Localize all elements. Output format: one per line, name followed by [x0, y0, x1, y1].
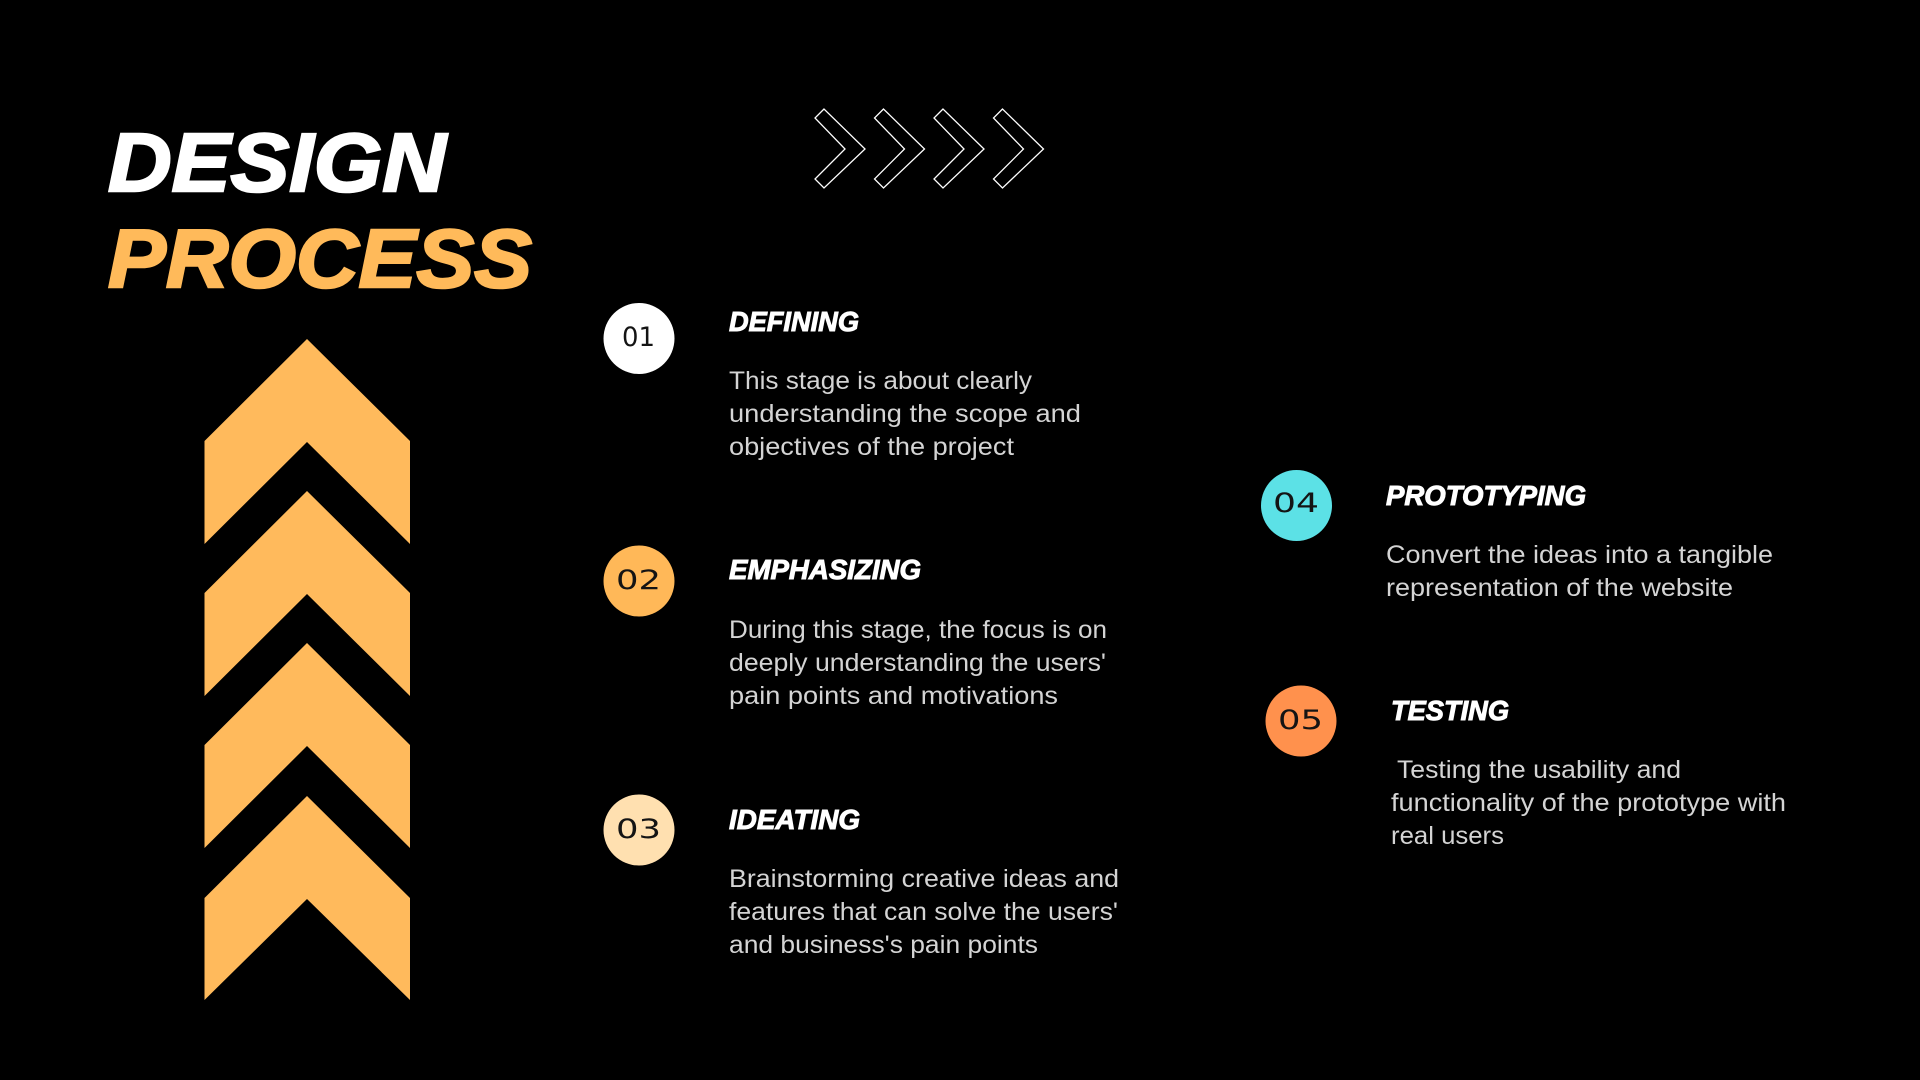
title line: design: DESIGN: [108, 116, 448, 209]
heading: ideating: IDEATING: [729, 804, 860, 835]
description: emphasizing: deeply understanding the users': [729, 649, 1106, 677]
description: emphasizing: pain points and motivations: [729, 682, 1058, 710]
heading: prototyping: PROTOTYPING: [1386, 480, 1586, 511]
badge 01: 01: [622, 322, 655, 353]
description: prototyping: [1386, 541, 1773, 602]
heading: defining: DEFINING: [729, 306, 859, 337]
description: ideating: features that can solve the users': [729, 898, 1118, 926]
step 01: defining: [604, 303, 1081, 461]
badge 05: 05: [1278, 705, 1323, 736]
badge 02: [604, 546, 674, 616]
description: testing: Testing the usability and: [1397, 756, 1681, 784]
description: defining: understanding the scope and: [729, 400, 1081, 428]
description: testing: [1391, 756, 1786, 850]
description: ideating: and business's pain points: [729, 931, 1038, 959]
step 05: testing: [1266, 686, 1786, 850]
badge 03: 03: [616, 814, 661, 845]
arrow: stacked upward chevrons: [204, 339, 410, 1000]
badge 02: 02: [616, 565, 661, 596]
step 03: ideating: [604, 794, 1119, 959]
badge 04: [1261, 470, 1332, 541]
badge 04: 04: [1273, 488, 1319, 519]
description: defining: This stage is about clearly: [729, 367, 1033, 395]
heading: testing: TESTING: [1391, 695, 1509, 726]
badge 01: [604, 303, 674, 374]
step 04: prototyping: [1261, 470, 1773, 602]
badge 03: [604, 794, 674, 866]
description: ideating: [729, 865, 1119, 959]
description: defining: [729, 367, 1081, 461]
description: ideating: Brainstorming creative ideas and: [729, 865, 1119, 893]
description: prototyping: representation of the website: [1386, 574, 1733, 602]
icon: outlined chevrons pointing right: [815, 109, 1044, 188]
description: testing: functionality of the prototype with: [1391, 789, 1786, 817]
step 02: emphasizing: [604, 546, 1107, 710]
title line: process: PROCESS: [108, 212, 532, 305]
description: emphasizing: During this stage, the focus is on: [729, 616, 1107, 644]
heading: emphasizing: EMPHASIZING: [729, 554, 921, 585]
description: defining: objectives of the project: [729, 433, 1014, 461]
description: emphasizing: [729, 616, 1107, 710]
description: prototyping: Convert the ideas into a tangible: [1386, 541, 1773, 569]
description: testing: real users: [1391, 822, 1504, 850]
title: [108, 116, 532, 305]
badge 05: [1266, 686, 1336, 756]
